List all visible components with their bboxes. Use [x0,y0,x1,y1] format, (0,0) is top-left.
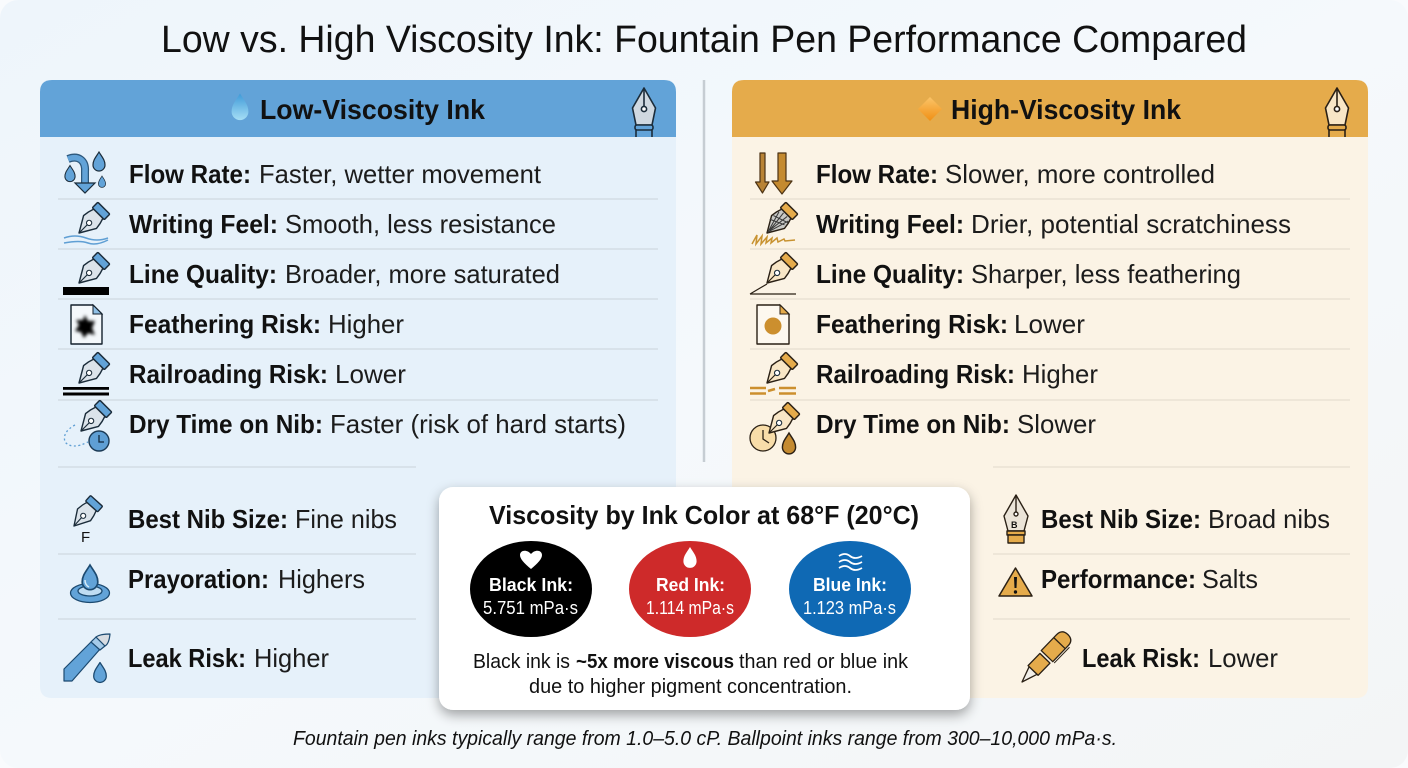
text: best nib size [128,504,397,534]
text: line quality [129,259,560,289]
text: leak risk: Leak Risk: [128,643,246,673]
text: performance: Salts [1202,564,1258,594]
icon: curved arrow with drops [65,152,106,193]
row: writing feel [64,202,556,244]
icon: orange pen [1016,629,1075,689]
callout note: due to higher pigment concentration. [529,675,852,698]
label: blue ink: Blue Ink: [813,575,887,595]
icon: pen with thick line [63,252,110,295]
text: railroading risk: Higher [1022,359,1098,389]
icon: header nib [632,88,656,137]
text: railroading risk: Railroading Risk: [129,359,328,389]
icon: fine nib [67,495,103,546]
text: dry time on nib: Faster (risk of hard starts) [330,409,626,439]
row: best nib size [67,495,397,546]
text: feathering risk: Higher [328,309,404,339]
center divider [703,80,705,462]
value: black ink: 5.751 mPa·s [483,598,578,618]
value: red ink: 1.114 mPa·s [646,598,734,618]
heading: low-viscosity ink: Low-Viscosity Ink [260,94,485,125]
text: feathering risk: Feathering Risk: [816,309,1008,339]
ink badge: black [470,541,592,637]
text: dry time on nib: Dry Time on Nib: [129,409,323,439]
callout note: ~5x more viscous [576,650,734,673]
text: line quality: Line Quality: [816,259,964,289]
icon: waves [839,554,862,570]
panel: high-viscosity ink [732,80,1368,698]
icon: header nib [1326,88,1348,137]
row: flow rate [65,152,542,193]
panel header: high-viscosity [732,80,1368,137]
text: line quality [816,259,1241,289]
text: flow rate: Flow Rate: [129,159,251,189]
panel: low-viscosity ink [40,80,676,698]
row: leak risk [64,634,329,682]
icon: drop with ripple [70,565,110,602]
row: feathering risk [757,305,1085,344]
callout: viscosity by ink color [439,487,970,710]
icon: page with feathered blot [71,305,102,344]
text: writing feel [816,209,1291,239]
text: railroading risk: Railroading Risk: [816,359,1015,389]
icon: water drop [232,94,248,120]
icon: pen with clock [64,400,112,451]
text: prayoration [128,564,365,594]
heading: high-viscosity ink: High-Viscosity Ink [951,94,1181,125]
text: performance: Performance: [1041,564,1196,594]
callout heading: Viscosity by Ink Color at 68°F (20°C) [489,500,919,530]
icon: broad nib [1004,495,1028,543]
text: feathering risk: Feathering Risk: [129,309,321,339]
row: line quality [63,252,560,295]
callout note: than red or blue ink [739,650,909,673]
text: writing feel: Writing Feel: [816,209,964,239]
text: leak risk [128,643,329,673]
icon: pen with fine line [750,252,798,294]
label: red ink: Red Ink: [656,575,725,595]
text: leak risk: Higher [254,643,329,673]
text: writing feel: Drier, potential scratchiness [971,209,1291,239]
title: Low vs. High Viscosity Ink: Fountain Pen Performance Compared [161,19,1247,61]
text: best nib size [1041,504,1330,534]
icon: fine nib: F [81,529,90,546]
footnote: Fountain pen inks typically range from 1.0–5.0 cP. Ballpoint inks range from 300–10,000 mPa·s. [293,728,1117,750]
icon: clock, pen and drop [750,402,800,454]
icon: orange diamond [918,97,942,121]
row: leak risk [1016,629,1278,689]
text: prayoration: Prayoration: [128,564,269,594]
row: line quality [750,252,1241,294]
icon: broad nib: B [1011,520,1018,530]
text: flow rate: Faster, wetter movement [259,159,542,189]
callout note [473,650,909,698]
icon: pen with broken lines [750,352,798,394]
panel header: low-viscosity [40,80,676,137]
value: blue ink: 1.123 mPa·s [803,598,896,618]
text: flow rate: Slower, more controlled [945,159,1215,189]
row: dry time on nib [750,402,1096,454]
row: flow rate [756,153,1215,194]
text: best nib size: Best Nib Size: [1041,504,1201,534]
icon: drop [683,547,697,568]
text: writing feel: Writing Feel: [129,209,278,239]
icon: pen with double lines [63,352,110,396]
text: line quality: Line Quality: [129,259,277,289]
text: best nib size: Best Nib Size: [128,504,288,534]
text: line quality: Broader, more saturated [285,259,560,289]
text: writing feel [129,209,556,239]
text: flow rate [129,159,542,189]
text: dry time on nib: Slower [1017,409,1096,439]
row: feathering risk [71,305,404,344]
text: dry time on nib: Dry Time on Nib: [816,409,1010,439]
ink badge: red [629,541,751,637]
row: railroading risk [750,352,1098,394]
row: best nib size [1004,495,1330,543]
text: prayoration: Highers [278,564,365,594]
text: leak risk: Leak Risk: [1082,643,1200,673]
icon: pen with scratchy line [752,202,798,244]
text: writing feel: Smooth, less resistance [285,209,556,239]
callout note: Black ink is [473,650,570,673]
icon: heart [520,551,542,569]
row: writing feel [752,202,1291,244]
icon: pen with smooth waves [64,202,110,244]
row: railroading risk [63,352,406,396]
text: leak risk [1082,643,1278,673]
text: flow rate: Flow Rate: [816,159,938,189]
row: prayoration [70,564,365,602]
ink badge: blue [789,541,911,637]
text: line quality: Sharper, less feathering [971,259,1241,289]
row: dry time on nib [64,400,626,451]
icon: page with clean dot [757,305,789,344]
icon: two down arrows [756,153,792,194]
text: best nib size: Fine nibs [295,504,397,534]
icon: warning triangle [999,568,1032,596]
text: dry time on nib [129,409,626,439]
text: railroading risk: Lower [335,359,406,389]
text: flow rate [816,159,1215,189]
text: feathering risk: Lower [1014,309,1085,339]
text: leak risk: Lower [1208,643,1278,673]
icon: leaking pen [64,634,110,682]
row: performance [999,564,1258,596]
text: best nib size: Broad nibs [1208,504,1330,534]
label: black ink: Black Ink: [489,575,573,595]
